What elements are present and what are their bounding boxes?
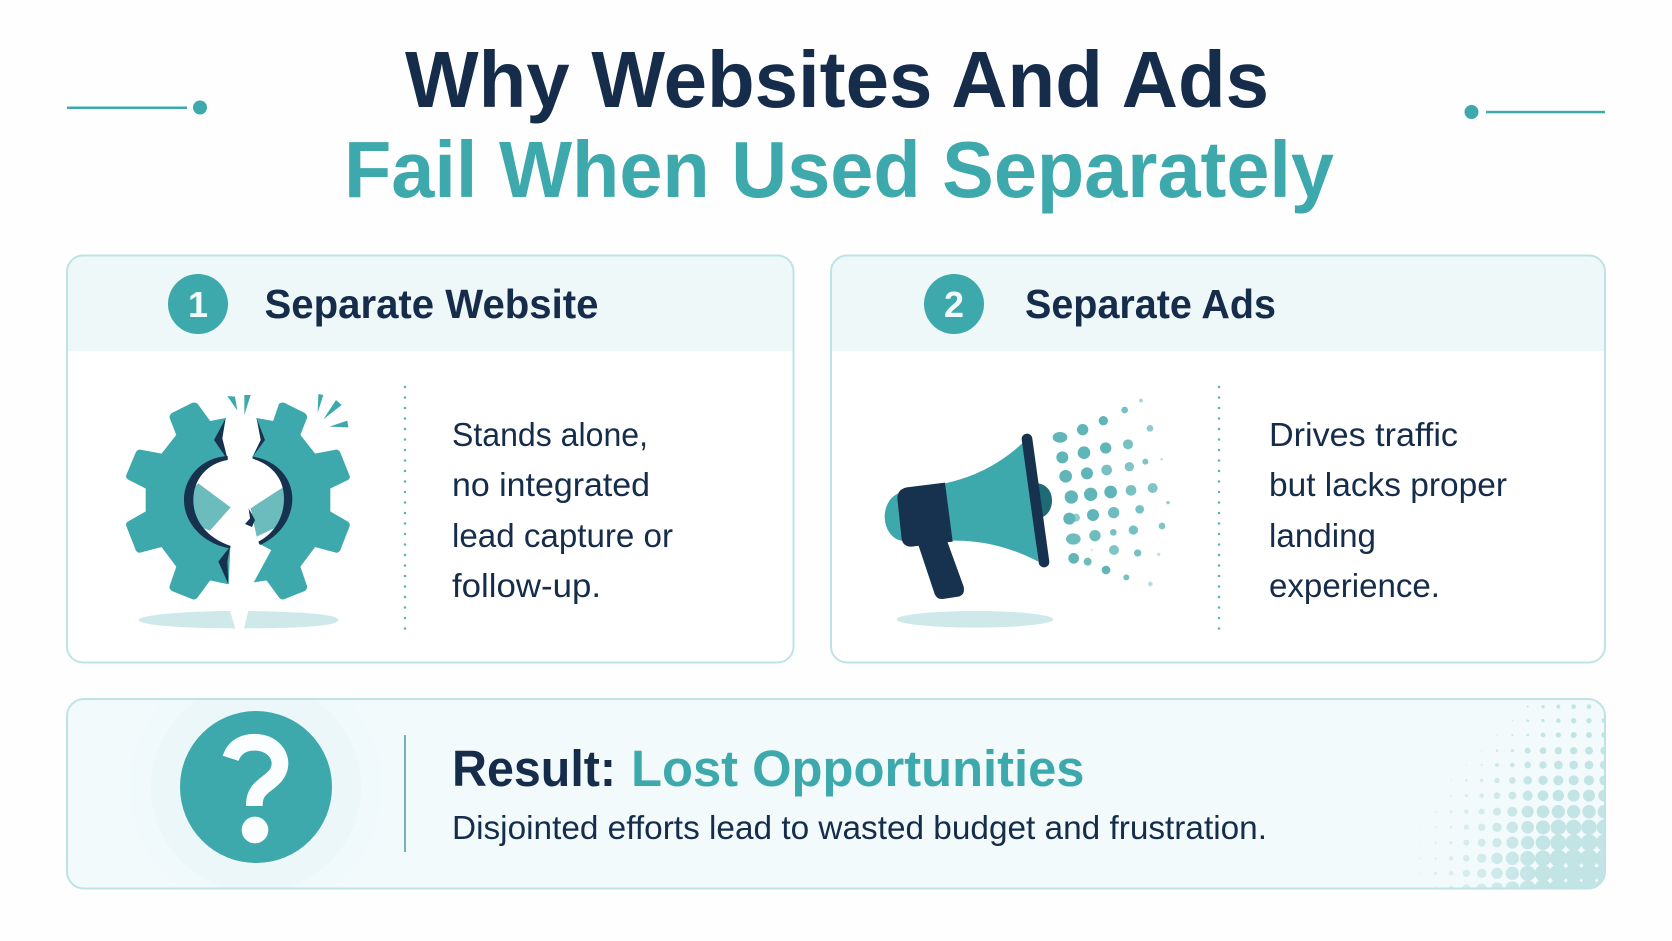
panel: result: [66, 698, 1606, 890]
panel header: separate ads: [831, 256, 1605, 351]
text: separate website description: Stands alone,: [452, 416, 648, 453]
text: separate ads description: experience.: [1269, 567, 1440, 604]
result highlight: Lost Opportunities: [631, 740, 1084, 797]
number badge 1: 1: [188, 284, 208, 325]
dotted divider: [1218, 387, 1220, 630]
title: Fail When Used Separately: [344, 125, 1334, 214]
icon: question mark: [180, 711, 332, 863]
heading: separate website: Separate Website: [264, 281, 598, 327]
result heading: Result:: [452, 740, 616, 797]
dotted divider: [404, 387, 406, 630]
text: separate website description: [452, 416, 673, 604]
text: separate ads description: but lacks proper: [1269, 466, 1507, 503]
halftone dots: [1404, 704, 1614, 898]
panel header: separate website: [67, 256, 794, 351]
text: separate website description: no integrated: [452, 466, 650, 503]
icon: broken gear: [126, 394, 349, 628]
title: Why Websites And Ads: [405, 35, 1269, 124]
heading: separate ads: Separate Ads: [1025, 281, 1276, 327]
panel: separate ads: [831, 256, 1605, 662]
panel: separate website: [67, 256, 794, 662]
result description: Disjointed efforts lead to wasted budget and frustration.: [452, 809, 1267, 846]
number badge 2: [924, 274, 984, 334]
left title ornament: [67, 100, 207, 114]
text: separate website description: lead capture or: [452, 517, 673, 554]
right title ornament: [1464, 105, 1605, 119]
text: separate ads description: landing: [1269, 517, 1376, 554]
title: [344, 35, 1334, 214]
text: separate ads description: [1269, 416, 1507, 604]
icon: megaphone: [885, 399, 1170, 628]
halo behind question icon: [130, 661, 382, 913]
number badge 2: 2: [944, 284, 964, 325]
text: separate ads description: Drives traffic: [1269, 416, 1458, 453]
number badge 1: [168, 274, 228, 334]
vertical divider: [404, 735, 406, 852]
text: separate website description: follow-up.: [452, 567, 601, 604]
